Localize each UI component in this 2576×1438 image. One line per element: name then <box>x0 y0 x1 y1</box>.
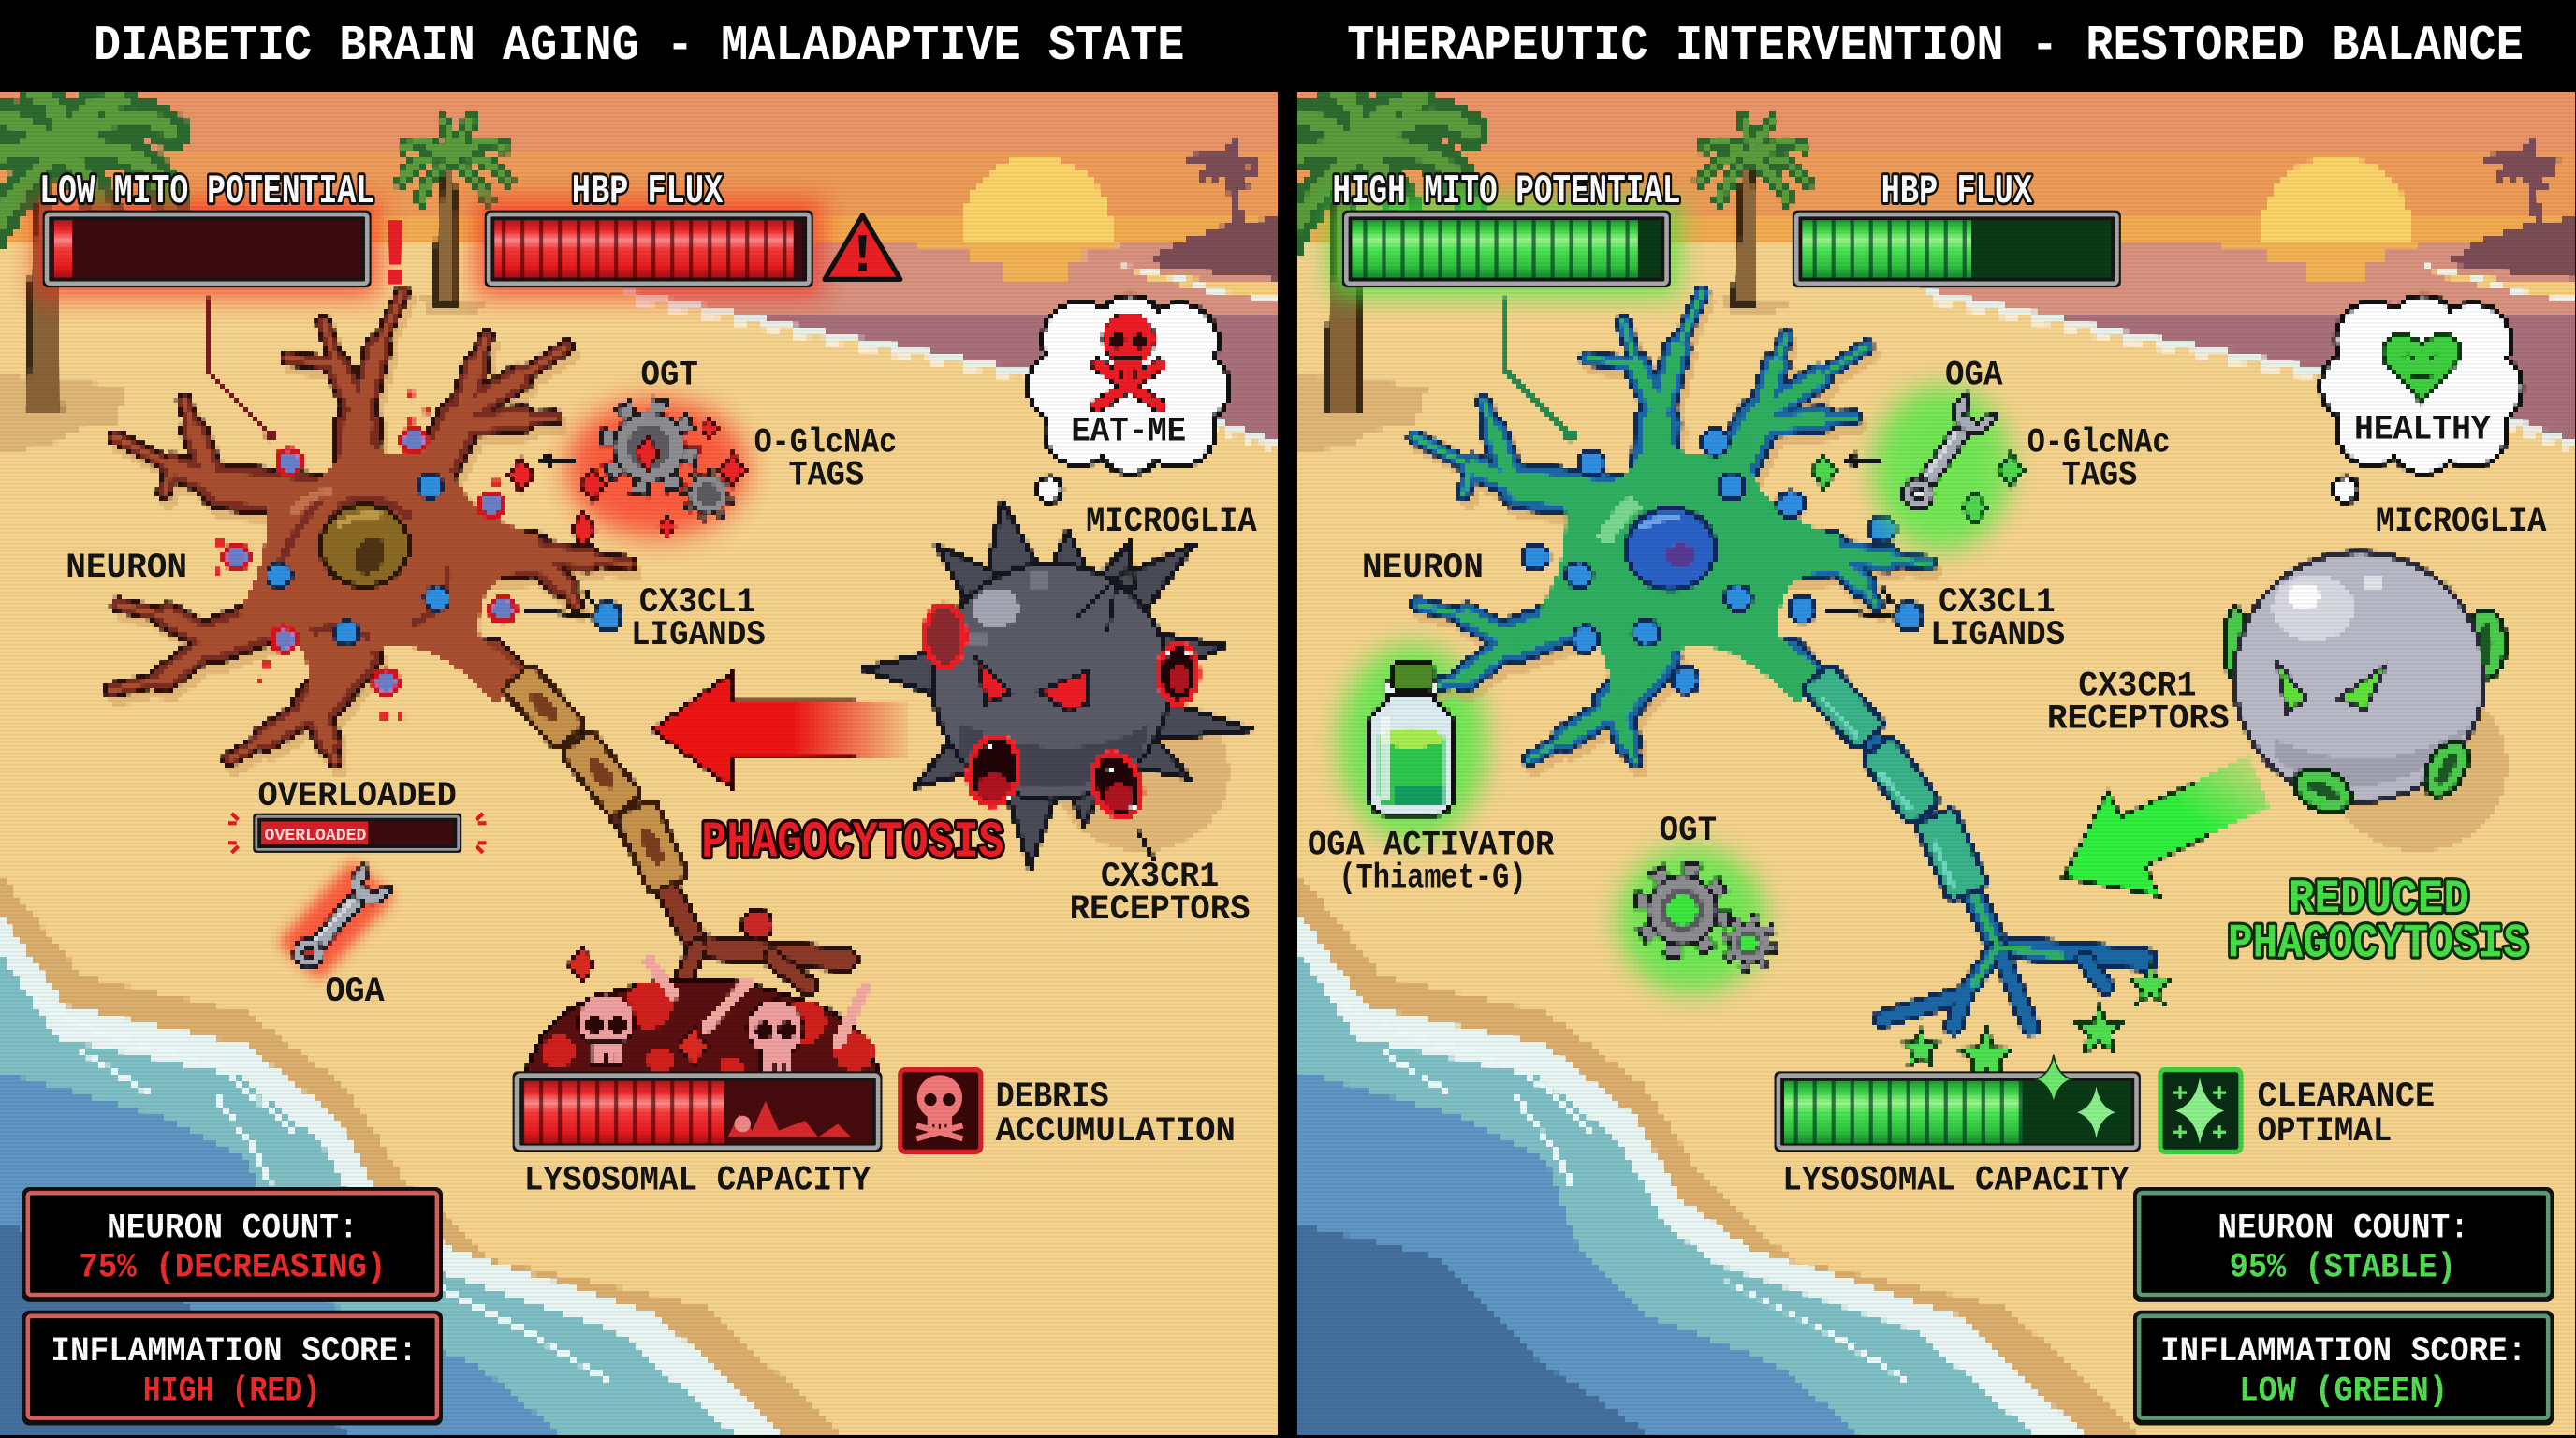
icon: OGT gears calm <box>1618 846 1773 994</box>
gauge: lysosomal capacity left: LYSOSOMAL CAPACITY <box>524 1162 871 1201</box>
labels: left: OGT <box>640 357 698 396</box>
title: left: DIABETIC BRAIN AGING - MALADAPTIVE STATE <box>94 18 1184 74</box>
labels: left: MICROGLIA <box>1086 503 1257 542</box>
CX3CL1 ligands, damaged <box>225 428 515 695</box>
labels: right: CX3CL1 <box>1939 583 2056 623</box>
myelin segments <box>502 663 689 894</box>
stat box: neuron count right <box>2136 1190 2552 1299</box>
labels: right <box>1308 357 2547 899</box>
icon: OGA activator bottle <box>1370 662 1453 815</box>
myelin segments <box>1801 663 1988 902</box>
gauge: lysosomal capacity left <box>513 1071 882 1201</box>
icon: microglia with spikes <box>862 501 1251 868</box>
red particles <box>213 391 500 720</box>
stat box: inflammation left <box>24 1313 440 1423</box>
icon: release stars <box>1902 964 2170 1081</box>
gauge: low mito potential: LOW MITO POTENTIAL <box>39 169 374 215</box>
labels: right: OGA ACTIVATOR <box>1308 827 1555 866</box>
gauge: HBP flux moderate: HBP FLUX <box>1881 169 2033 215</box>
labels: right: OGA <box>1945 357 2003 396</box>
icon: OGA wrench overloaded <box>285 862 393 976</box>
labels: left: EAT-ME <box>1071 412 1186 451</box>
gauge: HBP flux high: HBP FLUX <box>572 169 724 215</box>
labels: left: RECEPTORS <box>1070 890 1251 930</box>
icon: thought bubble eat-me <box>1030 298 1227 502</box>
bottle glow <box>1339 644 1486 842</box>
label: clearance optimal: CLEARANCE <box>2258 1078 2435 1117</box>
gauge: HBP flux moderate <box>1793 169 2121 287</box>
receptor leader line <box>1135 827 1155 861</box>
stat box: inflammation right <box>2136 1313 2552 1423</box>
arrow: reduced phagocytosis <box>2063 756 2269 896</box>
neuron with dendrites <box>111 292 846 992</box>
labels: right: TAGS <box>2062 457 2137 496</box>
icon: OGT gears with tags <box>508 399 748 546</box>
stat box: inflammation right: INFLAMMATION SCORE: <box>2160 1332 2526 1372</box>
stat box: neuron count left: NEURON COUNT: <box>107 1210 359 1249</box>
label: reduced phagocytosis <box>2228 873 2528 971</box>
microglia shadow <box>2330 681 2507 851</box>
label: reduced phagocytosis: PHAGOCYTOSIS <box>2228 917 2528 971</box>
panel: right illustrated art <box>1331 200 2520 1081</box>
leader line: mito <box>207 298 278 442</box>
stat box: inflammation left: INFLAMMATION SCORE: <box>51 1332 417 1372</box>
labels: left: O-GlcNAc <box>754 424 897 463</box>
label: clearance optimal: OPTIMAL <box>2258 1112 2392 1152</box>
labels: right: OGT <box>1660 812 1717 851</box>
label: debris accumulation: ACCUMULATION <box>996 1112 1236 1152</box>
icon: thought bubble healthy <box>2323 298 2520 472</box>
nucleus <box>320 505 409 587</box>
labels: left: TAGS <box>788 457 864 496</box>
labels: left: NEURON <box>66 549 187 588</box>
label: debris accumulation: DEBRIS <box>996 1078 1109 1117</box>
labels: left <box>66 357 1257 1012</box>
gauge: lysosomal capacity right: LYSOSOMAL CAPACITY <box>1782 1162 2130 1201</box>
stat box: inflammation left: HIGH (RED) <box>143 1372 320 1411</box>
gauge: OGA overloaded <box>228 814 487 853</box>
stat box: neuron count right: NEURON COUNT: <box>2217 1210 2469 1249</box>
labels: right: LIGANDS <box>1930 616 2065 655</box>
panel: left illustrated art <box>37 200 1251 1079</box>
leader line: mito <box>1506 298 1577 442</box>
labels: right: O-GlcNAc <box>2027 424 2170 463</box>
labels: right: RECEPTORS <box>2047 700 2230 740</box>
neuron with dendrites <box>1412 292 2145 1027</box>
icon: clearance sparkle <box>2160 1070 2241 1152</box>
label: reduced phagocytosis: REDUCED <box>2289 873 2469 927</box>
leader lines: ligands <box>526 588 622 630</box>
labels: right: CX3CR1 <box>2078 667 2197 706</box>
gauge: high mito potential <box>1332 169 1680 287</box>
labels: right: (Thiamet-G) <box>1339 859 1526 899</box>
stat box: neuron count left: 75% (DECREASING) <box>79 1249 386 1288</box>
label: phagocytosis: PHAGOCYTOSIS <box>701 814 1003 872</box>
stat box: inflammation right: LOW (GREEN) <box>2239 1372 2448 1411</box>
gauge: OGA overloaded: OVERLOADED <box>265 827 366 845</box>
stat box: neuron count right: 95% (STABLE) <box>2230 1249 2456 1288</box>
labels: left: OVERLOADED <box>258 777 457 816</box>
leader lines: ligands <box>1825 588 1923 630</box>
CX3CL1 ligands, healthy <box>1523 429 1895 694</box>
nucleus <box>1627 507 1715 590</box>
labels: left: OGA <box>326 973 386 1012</box>
gauge: lysosomal capacity right <box>1775 1055 2141 1201</box>
gauge: low mito potential <box>39 169 402 287</box>
icon: warning triangle <box>825 215 900 279</box>
label: debris accumulation <box>996 1078 1236 1152</box>
label: clearance optimal <box>2258 1078 2435 1152</box>
bar glow <box>37 200 822 296</box>
panel: right beach background <box>1218 91 2576 1438</box>
labels: left: CX3CL1 <box>639 583 755 623</box>
icon: debris skull <box>900 1070 981 1152</box>
icon: exclamation <box>388 220 402 285</box>
gauge: HBP flux high <box>485 169 900 287</box>
stat box: neuron count left <box>24 1190 440 1299</box>
icon: OGA wrench with tags <box>1811 386 2023 550</box>
labels: left: LIGANDS <box>631 616 766 655</box>
debris pile <box>526 910 877 1079</box>
labels: left: CX3CR1 <box>1101 858 1219 897</box>
labels: right: NEURON <box>1362 549 1484 588</box>
icon: smiling heart <box>2383 335 2461 403</box>
microglia shadow <box>1055 694 1229 851</box>
icon: microglia smooth <box>2224 552 2506 821</box>
panel: left beach background <box>0 91 1284 1438</box>
gauge: high mito potential: HIGH MITO POTENTIAL <box>1332 169 1680 215</box>
arrow: phagocytosis <box>652 674 907 787</box>
labels: right: MICROGLIA <box>2376 503 2547 542</box>
bar glow <box>1331 200 1679 296</box>
labels: right: HEALTHY <box>2354 411 2492 450</box>
